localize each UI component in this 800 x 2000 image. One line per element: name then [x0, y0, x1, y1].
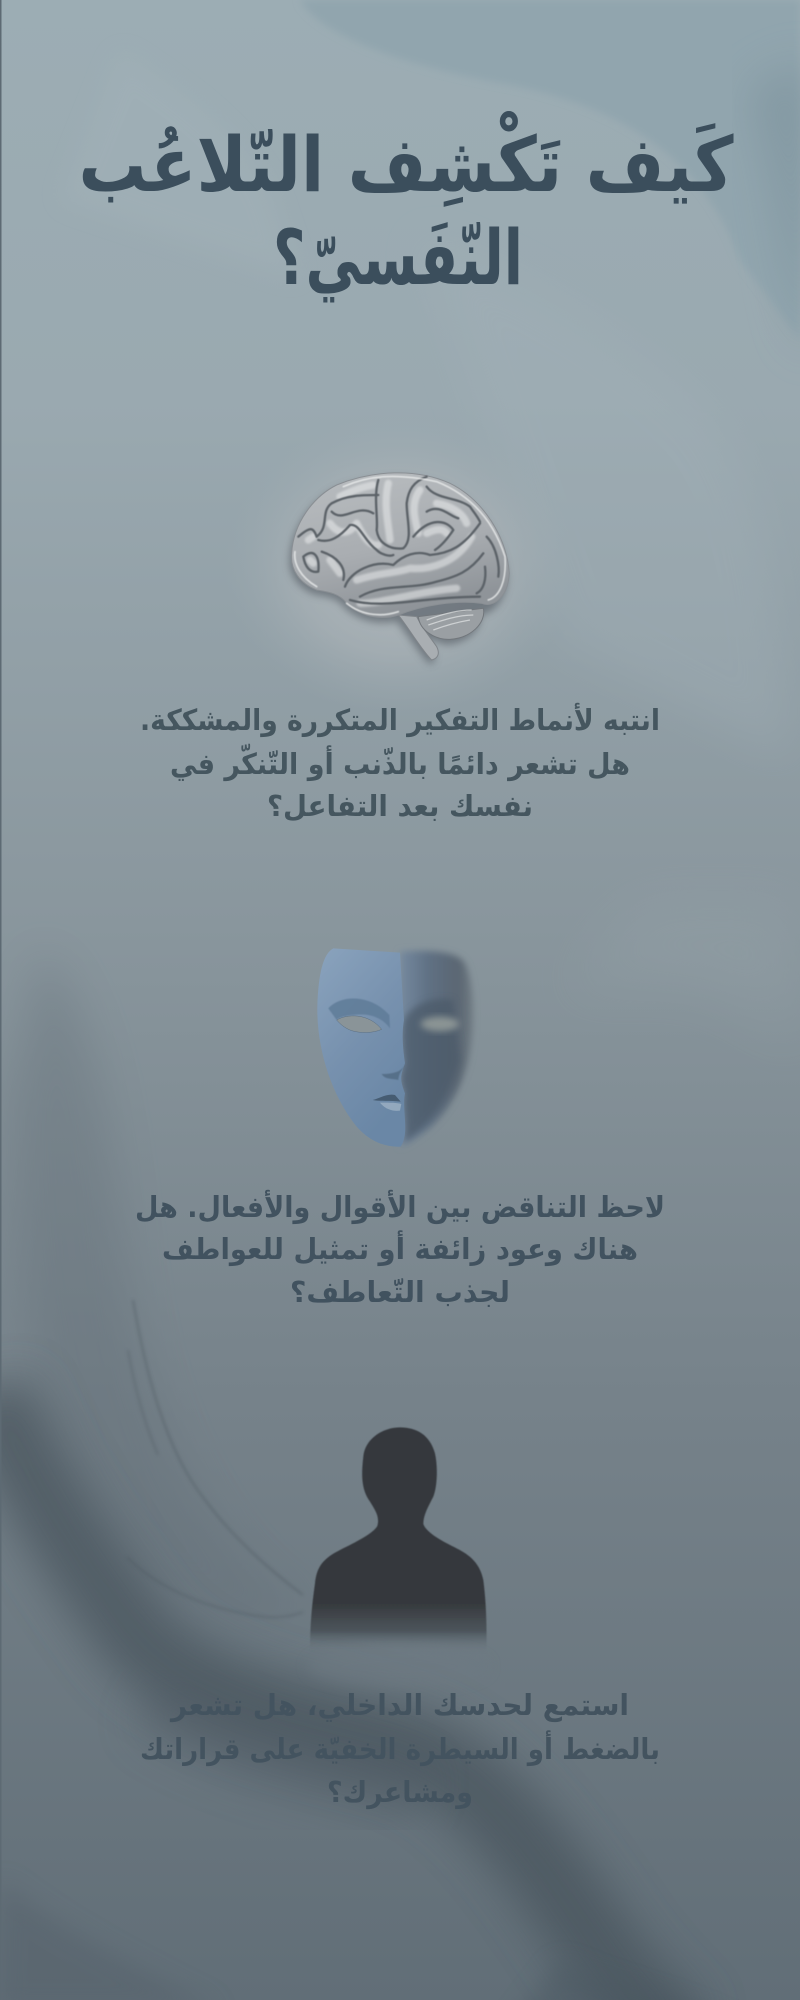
paragraph 1: هل تشعر دائمًا بالذّنب أو التّنكّر في: [170, 744, 630, 781]
upper left dark column: [10, 950, 306, 1621]
paragraph 1: انتبه لأنماط التفكير المتكررة والمشككة.: [140, 702, 660, 737]
rim light: [295, 476, 505, 615]
paragraph 3: بالضغط أو السيطرة الخفيّة على قراراتك: [140, 1730, 660, 1766]
gyri highlights: [308, 483, 472, 603]
brow shadow: [328, 998, 390, 1028]
icon: brain: [225, 415, 575, 715]
mask shadow side: [400, 951, 473, 1147]
cerebrum: [291, 473, 509, 618]
right light swirl: [420, 240, 790, 760]
title: [78, 111, 734, 303]
mask lit side: [317, 948, 405, 1147]
sulci dark: [298, 477, 499, 604]
paragraph 2: لجذب التّعاطف؟: [290, 1275, 510, 1309]
thin fold lines: [133, 1300, 303, 1595]
icon: half-faded mask: [317, 948, 473, 1147]
top left light swirl: [60, 50, 300, 280]
left edge line: [0, 0, 2, 2000]
eye glow on shadow side: [421, 1017, 459, 1031]
paragraph 1: [140, 702, 660, 823]
paragraph 1: نفسك بعد التفاعل؟: [267, 789, 533, 823]
paragraph 2: هناك وعود زائفة أو تمثيل للعواطف: [162, 1230, 638, 1266]
cerebellum and stem: [398, 615, 438, 660]
lower dark swirl: [0, 1390, 680, 2000]
paragraph 3: استمع لحدسك الداخلي، هل تشعر: [169, 1688, 629, 1722]
paragraph 2: [135, 1189, 665, 1309]
top right darker swirl: [300, 0, 800, 340]
paragraph 3: ومشاعرك؟: [327, 1775, 473, 1809]
brain shadow: [289, 478, 507, 665]
eye hole: [337, 1016, 382, 1033]
shade under brow on dark side: [401, 999, 460, 1143]
title: النّفَسيّ؟: [273, 213, 523, 303]
icon: silhouette person: [308, 1427, 488, 1687]
nose and lips: [382, 1063, 405, 1080]
title: كَيف تَكْشِف التّلاعُب: [78, 111, 734, 209]
paragraph 2: لاحظ التناقض بين الأقوال والأفعال. هل: [135, 1189, 665, 1224]
paragraph 3: [140, 1688, 660, 1809]
